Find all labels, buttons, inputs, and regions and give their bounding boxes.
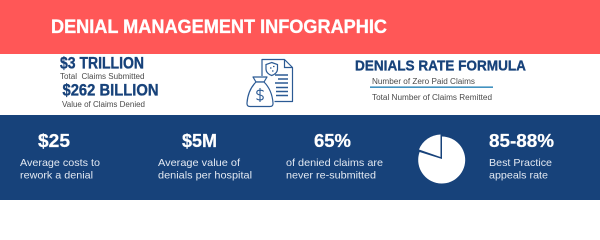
- stat: 262 billion claims denied: $262 BILLION: [62, 82, 158, 100]
- stat: 3 trillion claims submitted: $3 TRILLION: [60, 54, 144, 72]
- stat: 25 dollars rework cost: $25: [38, 131, 70, 151]
- stat: 25 dollars rework cost: [20, 131, 100, 182]
- stat: 85-88 percent appeals rate: appeals rate: [489, 170, 548, 182]
- stat: 5M per hospital: denials per hospital: [158, 170, 252, 182]
- stat: 3 trillion claims submitted: Total Claims Submitted: [60, 72, 144, 81]
- stat: 3 trillion claims submitted: [60, 54, 144, 81]
- panel: title banner: [0, 0, 600, 54]
- title: DENIAL MANAGEMENT INFOGRAPHIC: [51, 16, 387, 38]
- panel: claim totals and formula: [0, 54, 600, 115]
- stat: 65 percent never re-submitted: [286, 131, 383, 182]
- heading: denials rate formula: DENIALS RATE FORMULA: [355, 58, 526, 74]
- formula fraction: Number of Zero Paid Claims: [372, 77, 475, 86]
- stat: 25 dollars rework cost: Average costs to: [20, 157, 100, 169]
- stat: 65 percent never re-submitted: never re-submitted: [286, 170, 376, 182]
- stat: 25 dollars rework cost: rework a denial: [20, 170, 93, 182]
- stat: 262 billion claims denied: Value of Claims Denied: [62, 100, 145, 109]
- stat: 262 billion claims denied: [62, 82, 158, 109]
- stat: 65 percent never re-submitted: 65%: [314, 131, 351, 151]
- stat: 5M per hospital: $5M: [182, 131, 217, 151]
- stat: 85-88 percent appeals rate: 85-88%: [489, 131, 554, 151]
- formula fraction: Total Number of Claims Remitted: [372, 93, 492, 102]
- stat: 5M per hospital: [158, 131, 252, 182]
- stat: 85-88 percent appeals rate: Best Practice: [489, 157, 552, 169]
- stat: 85-88 percent appeals rate: [489, 131, 554, 182]
- stat: 5M per hospital: Average value of: [158, 157, 240, 169]
- stat: 65 percent never re-submitted: of denied claims are: [286, 157, 383, 169]
- panel: key statistics: [0, 115, 600, 200]
- pie chart: [418, 134, 465, 183]
- icon: money bag and policy document: [247, 60, 292, 106]
- formula fraction: [370, 77, 493, 102]
